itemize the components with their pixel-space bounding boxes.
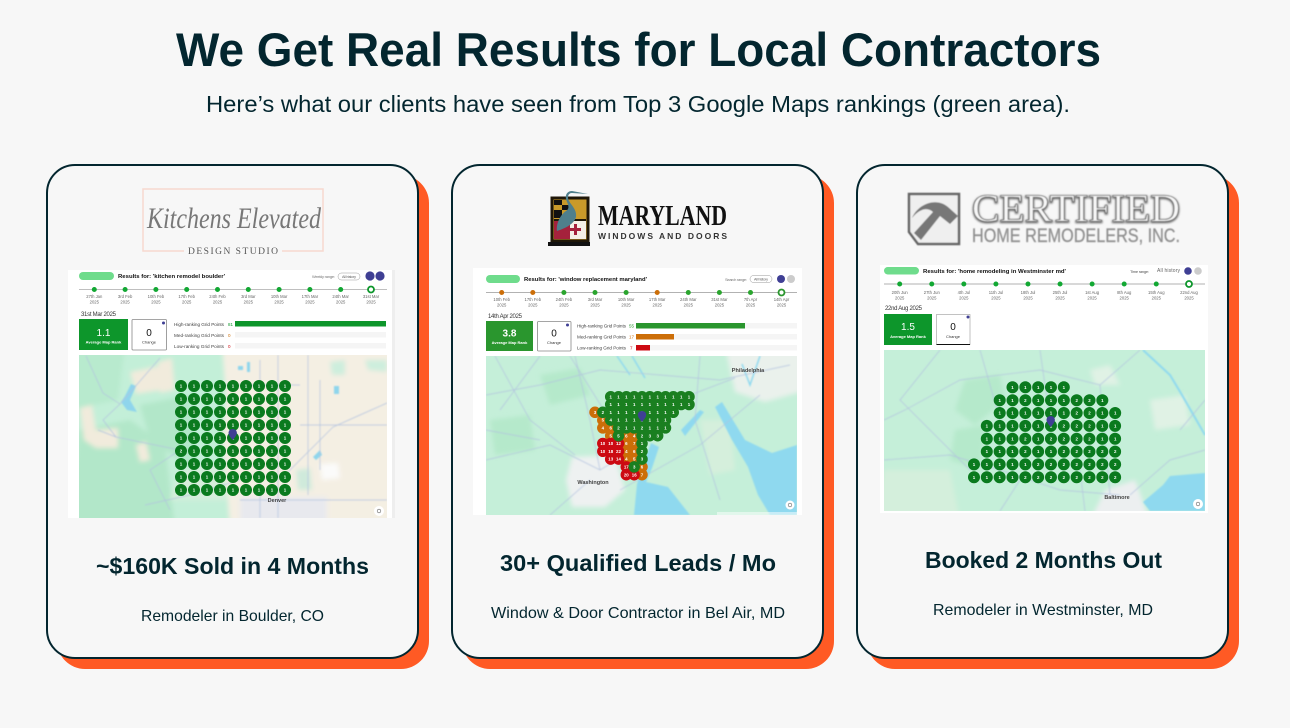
metric: average map rank: 1.1 [97, 328, 111, 339]
timeline: 2025 [895, 296, 905, 300]
grid point bars: High-ranking Grid Points [174, 322, 225, 327]
subtitle: Here’s what our clients have seen from Top 3 Google Maps rankings (green area). [206, 91, 1070, 117]
report date: 14th Apr 2025 [488, 314, 523, 320]
grid point bars [174, 321, 386, 349]
timeline: 17th Feb [178, 294, 196, 299]
rank grid: mixed green, orange and red points: 541112111 [602, 418, 667, 423]
range control [312, 271, 385, 281]
card body [452, 165, 823, 658]
result headline: ~$160K Sold in 4 Months [96, 553, 369, 579]
metric: average map rank [884, 314, 932, 345]
card offset shadow [57, 175, 429, 669]
grid point bars: 0 [228, 333, 231, 338]
timeline: 10th Feb [148, 294, 165, 299]
timeline: 15th Aug [1148, 290, 1165, 295]
grid point bars: Med-ranking Grid Points [577, 334, 627, 340]
timeline: 2025 [366, 300, 376, 304]
range control: Weekly range: [312, 274, 335, 279]
rank grid: mixed green, orange and red points: 10 [600, 441, 606, 446]
rank grid: mixed green, orange and red points: 671 [625, 441, 644, 446]
map: Bel Air and Chesapeake area: Philadelphia [732, 368, 765, 374]
results heading: Results for: 'home remodeling in Westminster md' [923, 269, 1066, 275]
timeline: 14th Apr [774, 297, 790, 302]
rank grid: mixed green, orange and red points [594, 394, 691, 477]
grid point bars: 0 [228, 344, 231, 349]
metric: change: Change [142, 340, 157, 344]
rank grid: green points: 11111122211 [986, 424, 1117, 428]
rank grid: 81 points all green: 111111111 [180, 384, 287, 389]
metric: average map rank: 3.8 [503, 328, 517, 340]
timeline: 2025 [244, 300, 254, 304]
range control: All history [754, 278, 768, 282]
rank grid: mixed green, orange and red points: 462112111 [602, 426, 667, 430]
timeline: 2025 [1120, 296, 1130, 300]
timeline: 24th Feb [556, 297, 573, 302]
rank grid: mixed green, orange and red points: 462 [625, 449, 644, 454]
rank grid: mixed green, orange and red points: 453 [625, 457, 644, 462]
rank grid: green points: 111122222222 [973, 475, 1117, 480]
rank grid: mixed green, orange and red points: 7 [641, 472, 644, 477]
result headline: 30+ Qualified Leads / Mo [500, 550, 776, 576]
metric: average map rank: 1.5 [901, 322, 915, 333]
rank grid: green points: 111112222222 [973, 462, 1117, 467]
logo: Certified Home Remodelers [909, 187, 1180, 247]
rank grid: mixed green, orange and red points: 22 [616, 449, 621, 454]
timeline: 1st Aug [1085, 290, 1100, 295]
timeline: 20th Jun [892, 290, 908, 295]
range control [725, 275, 795, 283]
metric: average map rank [79, 319, 128, 350]
rank grid: green points [973, 385, 1117, 480]
client description: Window & Door Contractor in Bel Air, MD [491, 605, 785, 622]
metric: change: Change [946, 334, 961, 339]
timeline: 2025 [777, 302, 787, 308]
timeline: 22nd Aug [1180, 290, 1199, 295]
result headline: Booked 2 Months Out [925, 547, 1162, 573]
rank grid: 81 points all green: 211111111 [180, 449, 287, 454]
logo: Maryland Windows and Doors: WINDOWS AND DOORS [598, 231, 727, 241]
range control: Time range: [1130, 269, 1149, 274]
title: We Get Real Results for Local Contractors [176, 23, 1101, 76]
metric: change: 0 [950, 322, 956, 333]
timeline: 17th Feb [525, 297, 542, 302]
timeline: 24th Feb [209, 294, 226, 299]
metric: average map rank: Average Map Rank [890, 334, 927, 339]
metric: change [132, 320, 166, 350]
logo: Kitchens Elevated Design Studio: DESIGN STUDIO [188, 247, 278, 257]
logo: Maryland Windows and Doors [548, 191, 727, 246]
timeline [486, 290, 797, 308]
logo: Certified Home Remodelers: CERTIFIED [972, 188, 1180, 231]
rank grid: 81 points all green [180, 384, 287, 493]
timeline: 2025 [120, 300, 130, 304]
grid point bars: 55 [629, 324, 635, 328]
client description: Remodeler in Westminster, MD [933, 602, 1153, 619]
timeline: 2025 [151, 300, 161, 304]
timeline: 11th Jul [989, 290, 1003, 295]
timeline: 4th Jul [958, 290, 970, 295]
timeline: 10th Feb [493, 297, 511, 302]
timeline: 2025 [213, 300, 223, 304]
timeline: 2025 [746, 302, 756, 308]
rank grid: 81 points all green: 111111111 [180, 462, 287, 467]
rank grid: mixed green, orange and red points: 32111121111 [594, 410, 675, 415]
map: Boulder area [79, 355, 387, 518]
grid point bars: Med-ranking Grid Points [174, 333, 225, 338]
timeline: 17th Mar [649, 297, 666, 302]
timeline: 27th Jan [86, 294, 103, 299]
timeline: 2025 [991, 296, 1001, 300]
timeline: 25th Jul [1053, 290, 1067, 295]
timeline: 2025 [1087, 296, 1097, 300]
logo: Kitchens Elevated Design Studio: Kitchens Elevated [146, 202, 322, 235]
rank grid: 81 points all green: 111111111 [180, 488, 287, 493]
timeline [884, 281, 1205, 300]
timeline: 7th Apr [744, 297, 758, 302]
rank grid: mixed green, orange and red points: 12 [616, 441, 621, 446]
rank grid: mixed green, orange and red points: 20 [624, 472, 629, 477]
rank grid: green points: 11111 [1011, 385, 1066, 390]
timeline: 2025 [497, 302, 507, 308]
rank grid: green points: 1111112211 [998, 411, 1117, 416]
location pin [228, 429, 237, 440]
results heading: Results for: 'kitchen remodel boulder' [118, 274, 225, 280]
logo: Kitchens Elevated Design Studio [143, 189, 323, 257]
timeline: 2025 [528, 302, 538, 308]
timeline: 10th Mar [271, 294, 288, 299]
keyword selector pill [486, 275, 520, 283]
grid point bars: 17 [629, 334, 635, 340]
rank grid: mixed green, orange and red points: 10 [600, 449, 606, 454]
timeline: 18th Jul [1021, 290, 1035, 295]
rank grid: mixed green, orange and red points: 11111111111 [609, 402, 691, 407]
panel: Westminster remodeler card [857, 165, 1239, 669]
rank grid: mixed green, orange and red points: 10 [608, 441, 614, 446]
metric: change: Change [547, 340, 562, 345]
keyword selector pill [79, 272, 114, 280]
timeline [79, 286, 387, 304]
timeline: 2025 [927, 296, 937, 300]
rank grid: 81 points all green: 111111111 [180, 475, 287, 480]
results heading: Results for: 'window replacement maryland' [524, 277, 647, 283]
timeline: 2025 [1152, 296, 1162, 300]
map: Bel Air and Chesapeake area [486, 346, 807, 515]
timeline: 3rd Mar [588, 297, 603, 302]
grid point bars: Low-ranking Grid Points [174, 344, 225, 349]
rank grid: 81 points all green: 111111111 [180, 436, 287, 441]
map: Westminster and Baltimore area: Baltimore [1104, 495, 1130, 501]
timeline: 24th Mar [332, 294, 350, 299]
timeline: 2025 [559, 302, 569, 308]
rank grid: mixed green, orange and red points: 16 [632, 472, 637, 477]
range control [1130, 267, 1202, 275]
range control: All history [1157, 268, 1180, 274]
timeline: 8th Aug [1117, 290, 1132, 295]
grid point bars: Low-ranking Grid Points [577, 346, 627, 350]
rank grid: mixed green, orange and red points: 13 [608, 457, 614, 462]
map: Boulder area: Denver [268, 498, 287, 504]
rank grid: 81 points all green: 111111111 [180, 423, 287, 428]
rank grid: mixed green, orange and red points: 18 [608, 449, 614, 454]
timeline: 2025 [715, 302, 725, 308]
map: Westminster and Baltimore area [874, 350, 1205, 521]
card body [857, 165, 1228, 658]
screenshot: ranking dashboard for home remodeling in westminster md [874, 265, 1208, 521]
keyword selector pill [884, 267, 919, 274]
grid point bars: 81 [228, 322, 234, 327]
range control: Search range: [725, 277, 747, 282]
timeline: 3rd Feb [118, 294, 133, 299]
timeline: 3rd Mar [241, 294, 256, 299]
grid point bars: High-ranking Grid Points [577, 324, 627, 328]
timeline: 2025 [653, 302, 663, 308]
timeline: 2025 [90, 300, 100, 304]
metric: change: 0 [146, 328, 152, 339]
timeline: 2025 [274, 300, 284, 304]
map: Bel Air and Chesapeake area: Washington [577, 480, 609, 486]
logo: Certified Home Remodelers: CERTIFIED [972, 187, 1180, 230]
logo: Maryland Windows and Doors: MARYLAND [598, 200, 727, 232]
timeline: 2025 [305, 300, 315, 304]
timeline: 2025 [621, 302, 631, 308]
rank grid: mixed green, orange and red points: 14 [616, 457, 621, 462]
location pin [638, 411, 646, 422]
rank grid: mixed green, orange and red points: 11111111111 [609, 394, 691, 399]
rank grid: green points: 11121122222 [986, 449, 1117, 454]
metric: change [538, 322, 571, 351]
rank grid: green points: 11121222211 [986, 436, 1117, 441]
card body [47, 165, 418, 658]
metric: change: 0 [551, 328, 557, 340]
timeline: 2025 [336, 300, 346, 304]
report date: 31st Mar 2025 [81, 312, 117, 318]
timeline: 2025 [590, 302, 600, 308]
metric: average map rank: Average Map Rank [86, 340, 122, 344]
screenshot: ranking dashboard for kitchen remodel boulder [68, 270, 397, 528]
timeline: 2025 [1055, 296, 1065, 300]
grid point bars: 7 [630, 346, 633, 350]
timeline: 31st Mar [711, 297, 728, 302]
timeline: 27th Jun [924, 290, 940, 295]
logo: Certified Home Remodelers: HOME REMODELERS, INC. [972, 226, 1180, 247]
screenshot: ranking dashboard for window replacement maryland [473, 268, 807, 515]
timeline: 2025 [1023, 296, 1033, 300]
rank grid: mixed green, orange and red points: 36 [633, 464, 644, 470]
timeline: 2025 [1184, 296, 1194, 300]
report date: 22nd Aug 2025 [885, 306, 923, 312]
panel: Bel Air window and door card [452, 165, 834, 669]
metric: average map rank [486, 321, 533, 351]
metric: change [936, 314, 970, 344]
rank grid: 81 points all green: 111111111 [180, 410, 287, 415]
timeline: 31st Mar [363, 294, 380, 299]
rank grid: 81 points all green: 111111111 [180, 397, 287, 402]
range control: All history [342, 275, 356, 279]
timeline: 10th Mar [618, 297, 635, 302]
rank grid: green points: 112111221 [998, 398, 1104, 403]
timeline: 2025 [959, 296, 969, 300]
card offset shadow [867, 175, 1239, 669]
metric: average map rank: Average Map Rank [492, 340, 528, 345]
rank grid: mixed green, orange and red points: 17 [624, 464, 629, 470]
timeline: 24th Mar [680, 297, 697, 302]
grid point bars [577, 323, 797, 350]
timeline: 17th Mar [302, 294, 319, 299]
timeline: 2025 [182, 300, 192, 304]
rank grid: mixed green, orange and red points: 5564233 [609, 433, 659, 438]
location pin [1046, 416, 1055, 427]
card offset shadow [462, 175, 834, 669]
panel: Boulder remodeler card [47, 165, 429, 669]
timeline: 2025 [684, 302, 694, 308]
client description: Remodeler in Boulder, CO [141, 608, 324, 625]
